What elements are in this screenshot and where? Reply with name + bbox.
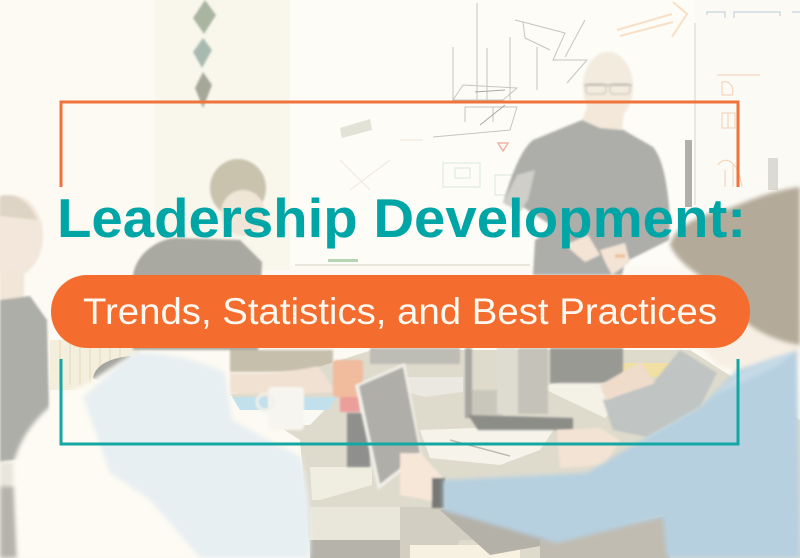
presenter: [503, 52, 670, 275]
table: [230, 350, 800, 558]
subtitle text: Trends, Statistics, and Best Practices: [83, 291, 717, 332]
man on left: [0, 195, 50, 462]
head of right person: [670, 187, 800, 345]
foreground person right: [443, 320, 800, 558]
whiteboard ledge and marker: [295, 264, 530, 266]
title: Leadership Development:: [57, 187, 746, 249]
woman at back: [133, 159, 333, 372]
eraser: [340, 119, 372, 138]
papers and folder: [232, 363, 672, 500]
frame: orange top: [61, 102, 738, 187]
front laptop: [355, 363, 422, 490]
center laptop and bottles: [370, 348, 623, 430]
whiteboard drawings: [340, 2, 800, 205]
chair: [93, 356, 130, 382]
red triangle on whiteboard: [498, 143, 508, 151]
grey sleeve person: [603, 350, 717, 437]
woman's arm: [230, 366, 336, 394]
hands: [400, 362, 655, 508]
frame: teal bottom: [61, 359, 738, 444]
foreground person left: [0, 353, 310, 558]
hanging ornament: [193, 0, 216, 108]
mugs: [257, 360, 370, 467]
subtitle pill: [51, 275, 750, 348]
